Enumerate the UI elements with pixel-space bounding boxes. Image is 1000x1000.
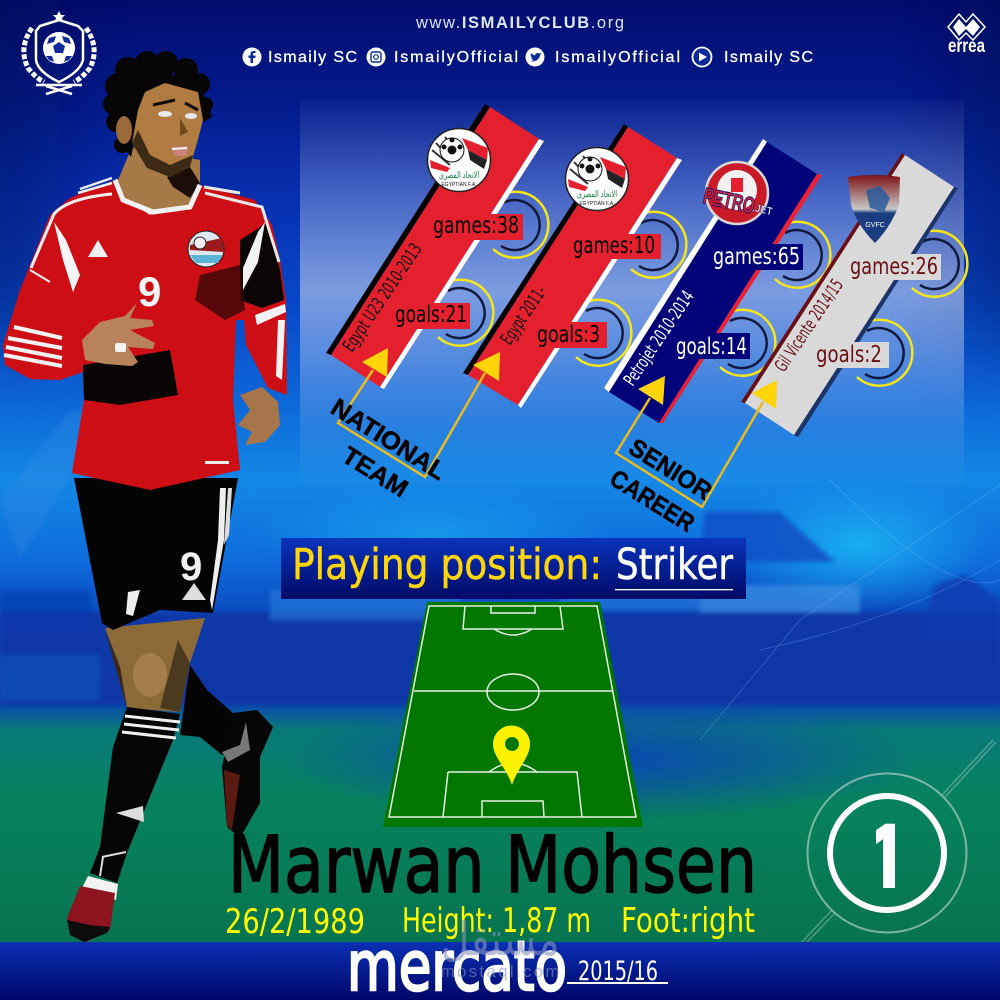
watermark [440, 913, 560, 981]
icon: Gil Vicente shield: GVFC [865, 222, 885, 229]
neck and head [103, 51, 213, 212]
icon: Egypt FA badge: الاتحاد المصرى [577, 189, 617, 199]
back leg [180, 665, 273, 838]
watermark: مستقل [440, 913, 560, 965]
heading: senior career [605, 433, 717, 538]
panel: Gil Vicente band [741, 153, 958, 437]
website: www.ISMAILYCLUB.org [415, 14, 624, 32]
stat: games 26: games:26 [850, 254, 938, 280]
stat: goals 21: goals:21 [395, 302, 467, 328]
stat: games 10: games:10 [573, 233, 655, 259]
heading: senior career: CAREER [605, 464, 699, 538]
panel: playing position: Striker [616, 540, 733, 590]
heading: national team: NATIONAL [326, 393, 451, 486]
label: Petrojet 2010-2014: Petrojet 2010-2014 [620, 287, 699, 390]
shorts: 9 [180, 545, 202, 589]
arm and torso [3, 178, 287, 490]
arrow: national team bracket [338, 348, 500, 477]
pitch diagram [383, 602, 643, 827]
watermark: mostaql.com [440, 962, 560, 981]
shorts [74, 478, 238, 630]
icon: Egypt FA badge: EGYPTIAN F.A. [441, 182, 477, 188]
arrow: senior career bracket [616, 376, 777, 507]
panel: playing position [281, 538, 746, 599]
decorative circles behind career bands [438, 192, 967, 386]
footer bar [0, 927, 1000, 1000]
stat: goals 14: goals:14 [676, 334, 747, 360]
label: Gil Vicente 2014/15: Gil Vicente 2014/15 [771, 275, 848, 376]
label: Egypt 2011-: Egypt 2011- [497, 282, 551, 349]
stat: goals 2: goals:2 [816, 342, 882, 368]
label: Egypt U23 2010-2013: Egypt U23 2010-2013 [339, 240, 427, 356]
icon: play [692, 48, 712, 66]
stat: goals 3: goals:3 [537, 322, 600, 348]
player photo illustration [3, 51, 287, 942]
social row: IsmailyOfficial [394, 49, 518, 66]
social row [242, 48, 813, 66]
player name: Marwan Mohsen [228, 821, 757, 911]
stat: games 65: games:65 [713, 244, 800, 270]
icon: Petrojet crest: PETRO [701, 182, 757, 219]
panel: career overlay [300, 100, 964, 492]
social row: Ismaily SC [724, 49, 813, 66]
social row: Ismaily SC [268, 49, 357, 66]
logo: errea: errea [948, 36, 985, 57]
panel: playing position: Playing position: [292, 540, 602, 590]
icon: instagram [366, 48, 386, 66]
panel: Petrojet band [604, 139, 822, 423]
icon: Petrojet crest [701, 162, 774, 224]
standing leg [67, 618, 205, 942]
chest details: 9 [138, 268, 161, 315]
chest details [88, 231, 229, 464]
icon: Gil Vicente shield [848, 175, 900, 243]
heading: national team: TEAM [337, 441, 413, 503]
player facts [225, 901, 755, 942]
icon: Petrojet crest: .JET [751, 202, 774, 218]
hands [82, 303, 280, 445]
panel: Egypt senior band [463, 124, 682, 408]
icon: Egypt FA badge: الاتحاد المصرى [439, 170, 479, 180]
jersey number badge: 1 [857, 802, 919, 927]
icon: Egypt FA badge [428, 128, 490, 192]
panel: Egypt U23 band [326, 104, 544, 389]
social row: IsmailyOfficial [555, 49, 680, 66]
icon: Egypt FA badge [566, 148, 628, 210]
icon: location pin [493, 726, 530, 785]
logo: Ismaily SC crest [24, 11, 94, 94]
icon: Egypt FA badge: EGYPTIAN F.A. [579, 201, 615, 207]
logo: errea [948, 14, 985, 57]
player facts: 26/2/1989 [225, 902, 365, 942]
icon: facebook [242, 48, 262, 66]
player facts: Height: 1,87 m [402, 901, 591, 941]
jersey number badge [801, 740, 996, 942]
player facts: Foot:right [621, 901, 755, 941]
season: 2015/16 [578, 956, 658, 987]
heading: senior career: SENIOR [624, 433, 717, 506]
stat: games 38: games:38 [433, 213, 519, 239]
icon: twitter [526, 48, 544, 66]
